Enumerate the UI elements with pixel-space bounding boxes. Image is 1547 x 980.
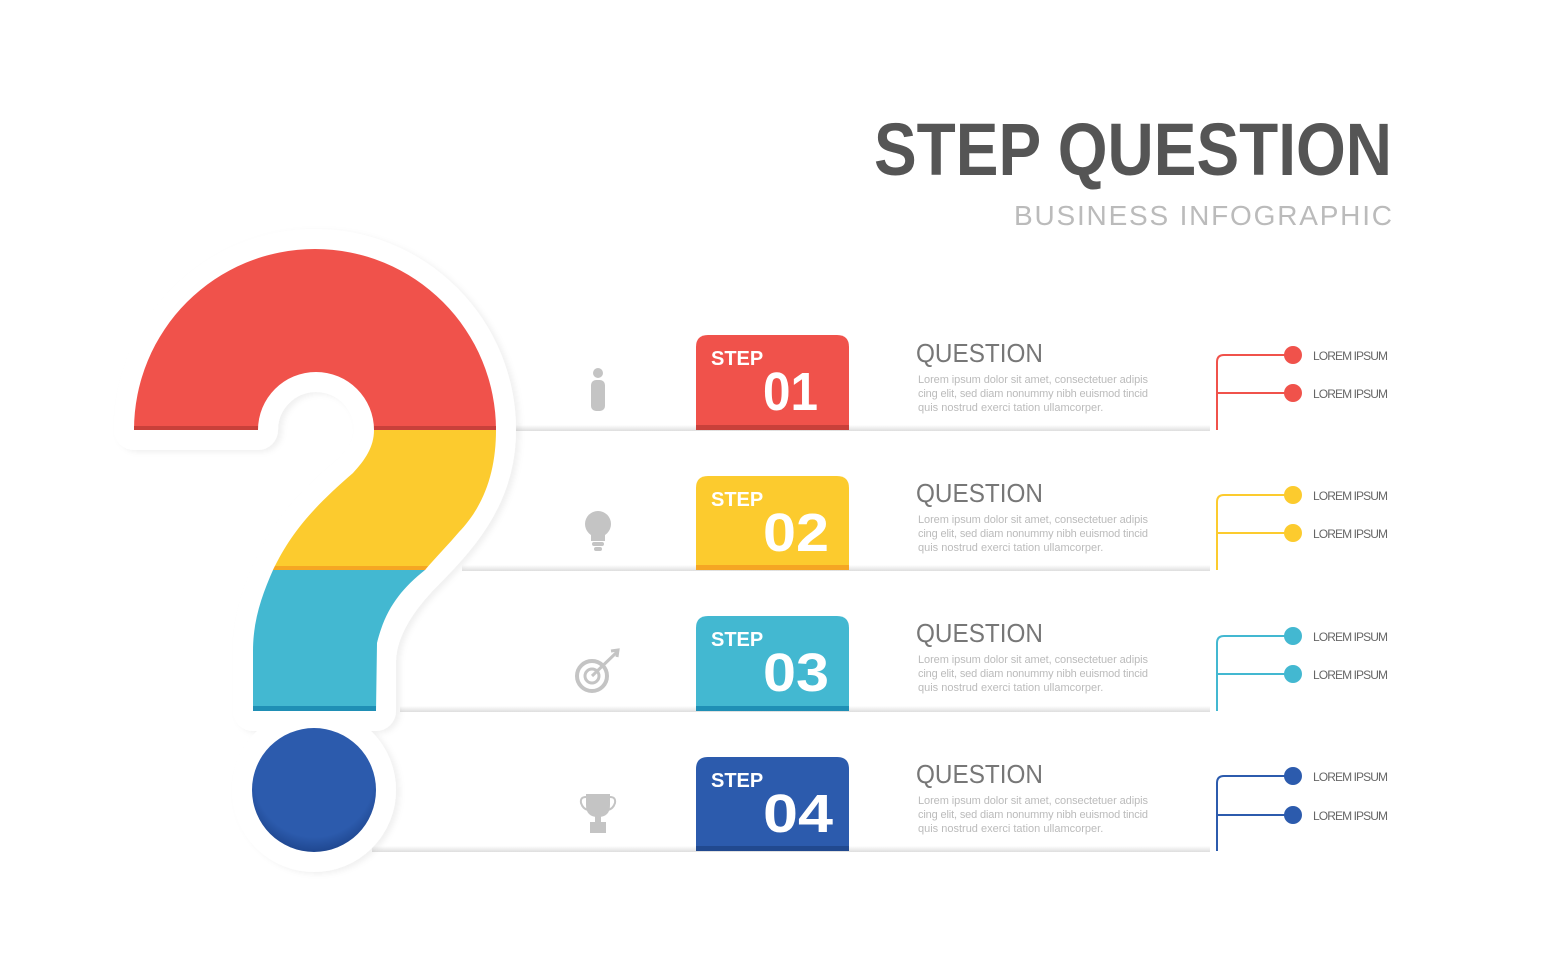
step badge 04: STEP [711, 770, 763, 792]
white outline [134, 249, 496, 852]
ribbon shadows [372, 425, 1210, 852]
title: STEP QUESTION [874, 108, 1392, 191]
text block: Lorem ipsum dolor sit amet, consectetuer adipis [918, 654, 1148, 666]
white fill to hide inner shadows [134, 249, 496, 711]
bracket list [1217, 346, 1388, 430]
step badge 03: STEP [711, 629, 763, 651]
icon: person [591, 368, 605, 411]
text block: cing elit, sed diam nonummy nibh euismod tincid [918, 528, 1148, 540]
step badge 03 [696, 616, 849, 711]
bracket list: LOREM IPSUM [1313, 489, 1388, 503]
text block: QUESTION [916, 759, 1043, 789]
bracket list: LOREM IPSUM [1313, 809, 1388, 823]
text block [916, 759, 1148, 835]
bracket list: LOREM IPSUM [1313, 527, 1388, 541]
text block: Lorem ipsum dolor sit amet, consectetuer adipis [918, 514, 1148, 526]
bracket list [1217, 767, 1388, 851]
step badge 02: 02 [763, 503, 829, 563]
text block: QUESTION [916, 338, 1043, 368]
text block: QUESTION [916, 478, 1043, 508]
step badge 04 [696, 757, 849, 851]
red segment [134, 249, 496, 430]
text block: cing elit, sed diam nonummy nibh euismod tincid [918, 809, 1148, 821]
icon: bulb [585, 511, 611, 551]
bracket list: LOREM IPSUM [1313, 349, 1388, 363]
bracket list: LOREM IPSUM [1313, 387, 1388, 401]
step badge 01 [696, 335, 849, 430]
row 4 [581, 757, 1388, 851]
text block: quis nostrud exerci tation ullamcorper. [918, 402, 1103, 414]
subtitle: BUSINESS INFOGRAPHIC [1014, 200, 1392, 231]
bracket list: LOREM IPSUM [1313, 668, 1388, 682]
text block [916, 618, 1148, 694]
bracket list: LOREM IPSUM [1313, 630, 1388, 644]
dot [252, 728, 376, 852]
bracket list: LOREM IPSUM [1313, 770, 1388, 784]
icon: trophy [581, 794, 615, 833]
text block: quis nostrud exerci tation ullamcorper. [918, 823, 1103, 835]
text block [916, 338, 1148, 414]
text block: quis nostrud exerci tation ullamcorper. [918, 542, 1103, 554]
cyan segment [253, 570, 425, 711]
step badge 02 [696, 476, 849, 570]
icon: target [577, 650, 618, 691]
row 3 [577, 616, 1388, 711]
step badge 01: STEP [711, 348, 763, 370]
bracket list [1217, 627, 1388, 711]
text block: cing elit, sed diam nonummy nibh euismod tincid [918, 668, 1148, 680]
step badge 02: STEP [711, 489, 763, 511]
row 1 [591, 335, 1388, 430]
row 2 [585, 476, 1388, 570]
text block: quis nostrud exerci tation ullamcorper. [918, 682, 1103, 694]
step badge 03: 03 [763, 643, 829, 703]
text block: Lorem ipsum dolor sit amet, consectetuer adipis [918, 374, 1148, 386]
yellow segment [273, 430, 496, 570]
step badge 04: 04 [763, 784, 833, 844]
text block: cing elit, sed diam nonummy nibh euismod tincid [918, 388, 1148, 400]
bracket list [1217, 486, 1388, 570]
step badge 01: 01 [763, 362, 818, 422]
text block [916, 478, 1148, 554]
text block: Lorem ipsum dolor sit amet, consectetuer adipis [918, 795, 1148, 807]
question mark [134, 249, 496, 852]
text block: QUESTION [916, 618, 1043, 648]
